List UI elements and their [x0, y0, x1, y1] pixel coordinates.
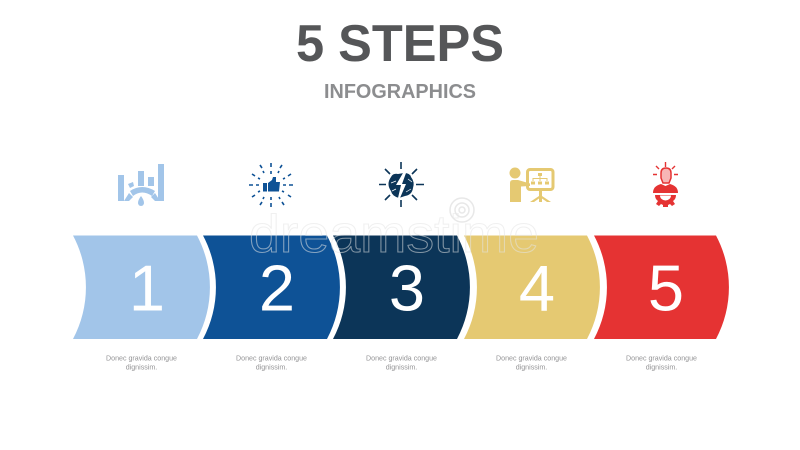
- icon: person with gear and idea rays: [653, 162, 678, 207]
- icon: thumbs up with burst: [249, 163, 293, 207]
- step 2: blue segment: 2: [259, 252, 295, 324]
- caption 1: dignissim.: [126, 364, 157, 372]
- step 2: blue segment: [203, 236, 340, 339]
- step 1: light blue segment: [73, 236, 210, 339]
- caption 3: dignissim.: [386, 364, 417, 372]
- caption 4: Donec gravida congue: [496, 354, 567, 362]
- icon: bar chart with gauge and drop: [118, 164, 164, 206]
- caption 3: Donec gravida congue: [366, 354, 437, 362]
- step 5: red segment: 5: [648, 252, 684, 324]
- title: 5 STEPS: [296, 15, 504, 73]
- step 3: navy segment: 3: [389, 252, 425, 324]
- icon: presenter with org chart board: [510, 168, 553, 202]
- caption 2: Donec gravida congue: [236, 354, 307, 362]
- step 3: navy segment: [333, 236, 470, 339]
- watermark: dreamstime: [249, 205, 539, 264]
- step 1: light blue segment: 1: [129, 252, 165, 324]
- caption 5: dignissim.: [646, 364, 677, 372]
- caption 5: Donec gravida congue: [626, 354, 697, 362]
- step 4: gold segment: 4: [519, 252, 555, 324]
- caption 4: dignissim.: [516, 364, 547, 372]
- caption 1: Donec gravida congue: [106, 354, 177, 362]
- step 5: red segment: [594, 236, 729, 339]
- caption 2: dignissim.: [256, 364, 287, 372]
- icon: brain with lightning and rays: [379, 162, 424, 207]
- subtitle: INFOGRAPHICS: [324, 81, 476, 103]
- step 4: gold segment: [464, 236, 600, 339]
